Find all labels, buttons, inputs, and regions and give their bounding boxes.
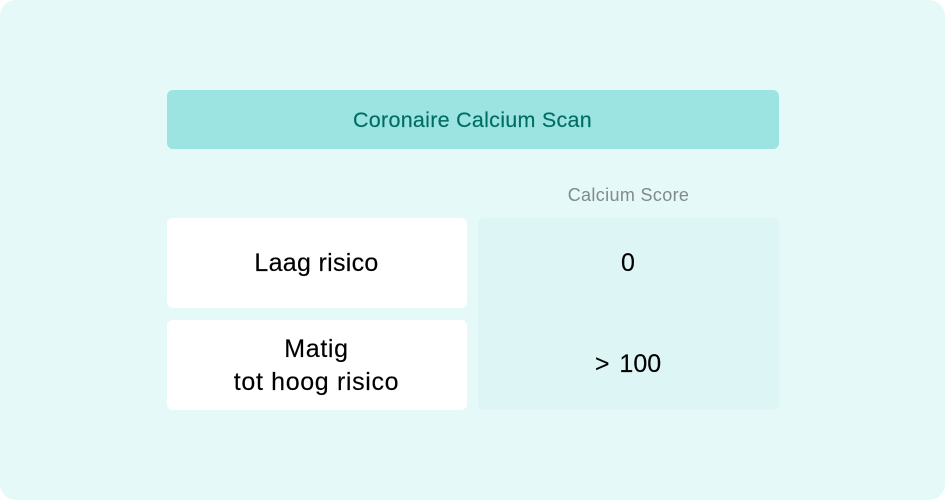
text: Matig tot hoog risico: tot hoog risico	[234, 368, 399, 396]
row label: Matig tot hoog risico	[166, 320, 466, 410]
header bar: Coronaire Calcium Scan	[166, 90, 778, 148]
heading: Coronaire Calcium Scan	[353, 108, 592, 132]
score: > 100: > 100	[595, 350, 661, 378]
text: Laag risico: Laag risico	[254, 249, 379, 277]
score: 0: 0	[621, 249, 635, 277]
text: Matig tot hoog risico: Matig	[284, 335, 349, 363]
row label: Laag risico	[166, 218, 466, 308]
score panel	[478, 218, 778, 410]
text: Matig tot hoog risico	[234, 335, 399, 396]
column label: Calcium Score: Calcium Score	[568, 185, 689, 205]
